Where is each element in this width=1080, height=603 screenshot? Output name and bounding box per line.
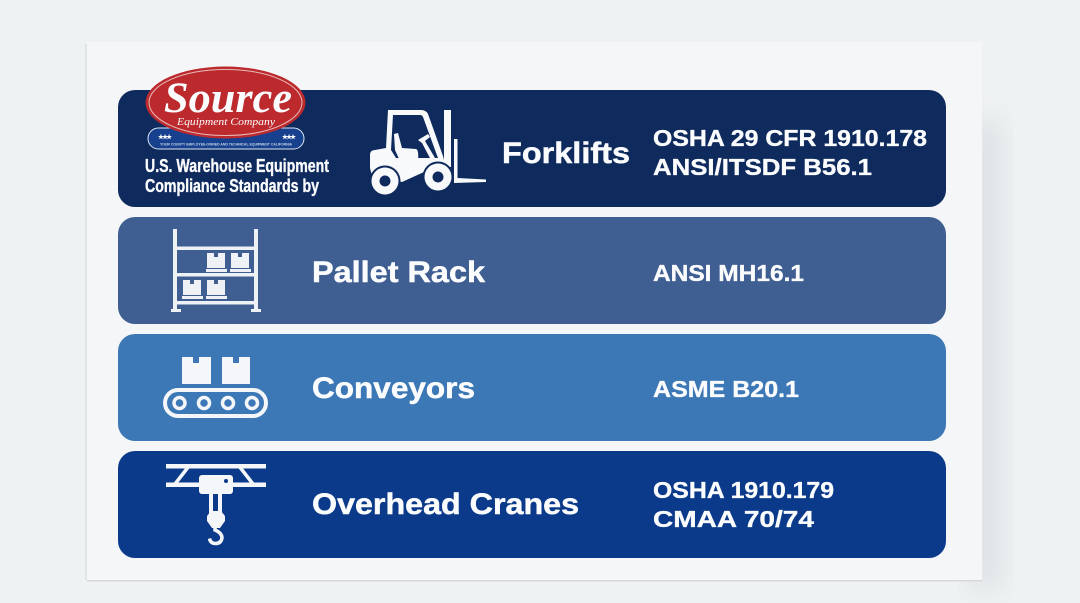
icon: pallet rack — [171, 229, 261, 312]
caption: compliance standards: Compliance Standards by — [145, 176, 319, 196]
caption: compliance standards — [145, 156, 329, 196]
panel: conveyors — [118, 334, 946, 441]
icon: overhead crane — [166, 464, 266, 544]
logo tagline band — [148, 128, 304, 149]
icon: forklift — [370, 110, 486, 196]
standards: forklifts: ANSI/ITSDF B56.1 — [653, 154, 872, 180]
logo tagline band: YOUR COUNTY EMPLOYEE-OWNED AND TECHNICAL EQUIPMENT CALIFORNIA — [160, 142, 292, 146]
logo: Source Equipment Company — [146, 66, 306, 149]
logo oval — [146, 66, 306, 138]
standards: forklifts — [653, 125, 927, 180]
logo: Source Equipment Company: Equipment Company — [176, 116, 275, 128]
label: pallet rack: Pallet Rack — [312, 256, 485, 289]
label: conveyors: Conveyors — [312, 372, 475, 405]
standards: overhead cranes: CMAA 70/74 — [653, 506, 814, 532]
panel: overhead cranes — [118, 451, 946, 558]
logo tagline band: ★★★ — [158, 133, 173, 141]
standards: overhead cranes: OSHA 1910.179 — [653, 477, 834, 503]
logo: Source Equipment Company: Source — [164, 75, 292, 122]
standards: conveyors: ASME B20.1 — [653, 376, 799, 402]
caption: compliance standards: U.S. Warehouse Equipment — [145, 156, 329, 176]
label: forklifts: Forklifts — [502, 137, 630, 170]
white sign board — [87, 42, 982, 582]
logo tagline band: ★★★ — [282, 133, 297, 141]
standards: forklifts: OSHA 29 CFR 1910.178 — [653, 125, 927, 151]
panel: forklifts — [118, 90, 946, 207]
label: overhead cranes: Overhead Cranes — [312, 488, 579, 521]
standards: overhead cranes — [653, 477, 834, 532]
panel: pallet rack — [118, 217, 946, 324]
standards: pallet rack: ANSI MH16.1 — [653, 260, 804, 286]
icon: conveyor — [165, 357, 266, 416]
